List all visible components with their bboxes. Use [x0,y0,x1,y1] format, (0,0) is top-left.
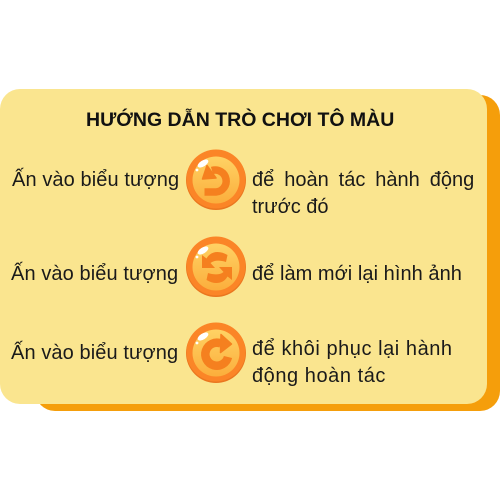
text: row 3 right: để khôi phục lại hành [252,338,453,360]
title: HƯỚNG DẪN TRÒ CHƠI TÔ MÀU [86,109,394,131]
text: row 1 left: Ấn vào biểu tượng [12,169,179,191]
panel: orange back card [35,95,500,411]
text: row 2 right: để làm mới lại hình ảnh [252,263,462,285]
icon: refresh button [186,236,246,297]
text: row 1 right: để hoàn tác hành động [252,169,474,191]
text: row 2 left: Ấn vào biểu tượng [11,263,178,285]
text: row 1 right second line: trước đó [252,196,329,218]
icon: undo button [186,150,246,210]
icon: redo button [186,322,246,383]
text: row 3 left: Ấn vào biểu tượng [11,342,178,364]
panel: yellow front card [0,89,487,404]
text: row 3 right second line: động hoàn tác [252,365,386,387]
